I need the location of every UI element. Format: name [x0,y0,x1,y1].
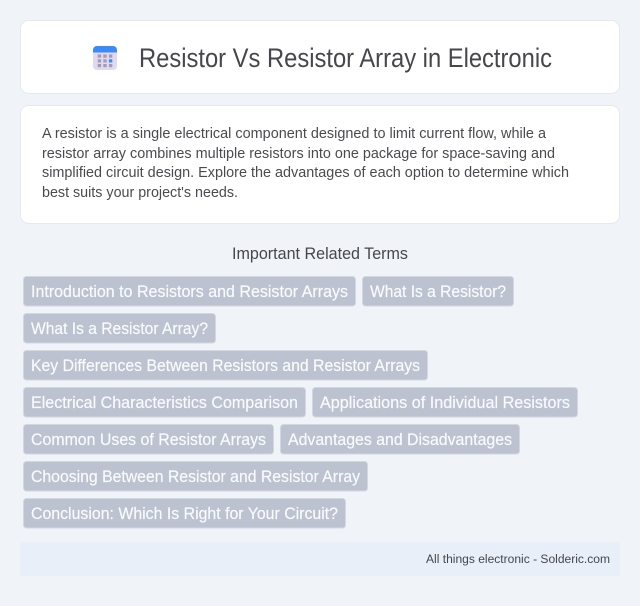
title: Resistor Vs Resistor Array in Electronic [139,43,552,73]
chip: applications: Applications of Individual Resistors [320,393,570,412]
related terms chips [24,276,578,528]
description text: resistor array combines multiple resistors into one package for space-saving and [42,146,555,162]
chip: key differences [24,350,428,380]
chip: key differences: Key Differences Between Resistors and Resistor Arrays [31,356,420,375]
heading: important related terms: Important Related Terms [232,245,408,263]
chip: applications [312,388,578,417]
header panel [20,20,620,94]
icon: calendar grid [93,46,117,70]
chip: choosing: Choosing Between Resistor and Resistor Array [31,467,361,486]
description text: best suits your project's needs. [42,185,238,201]
chip: common uses [24,424,274,454]
chip: introduction: Introduction to Resistors and Resistor Arrays [31,282,348,301]
chip: conclusion [24,498,346,528]
panel: description [20,106,620,224]
chip: common uses: Common Uses of Resistor Arrays [31,430,266,449]
chip: choosing [24,462,368,491]
chip: what is a resistor [362,276,514,306]
footer text: All things electronic - Solderic.com [426,552,610,566]
chip: introduction [24,276,356,306]
chip: electrical characteristics [24,388,306,417]
chip: what is a resistor array: What Is a Resistor Array? [31,319,208,338]
description text [42,126,569,201]
chip: electrical characteristics: Electrical Characteristics Comparison [31,393,298,412]
chip: conclusion: Conclusion: Which Is Right for Your Circuit? [31,504,338,523]
description text: simplified circuit design. Explore the advantages of each option to determine which [42,165,569,181]
chip: what is a resistor: What Is a Resistor? [370,282,506,301]
chip: what is a resistor array [24,314,216,343]
description text: A resistor is a single electrical component designed to limit current flow, while a [42,126,547,142]
footer [20,542,620,576]
chip: advantages [280,424,520,454]
chip: advantages: Advantages and Disadvantages [288,430,512,449]
